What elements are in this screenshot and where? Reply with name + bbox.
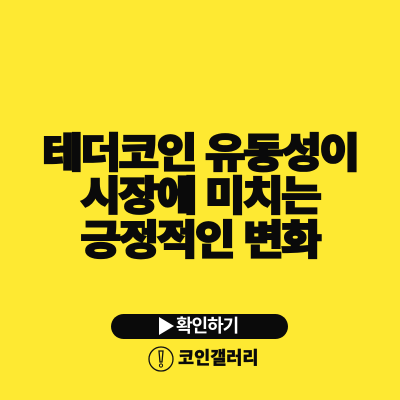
title: 긍정적인 변화 <box>80 218 320 263</box>
title: 시장에 미치는 <box>80 174 320 219</box>
logo text: 코인갤러리 <box>178 348 258 368</box>
icon: exclamation circle <box>148 346 174 372</box>
icon: play triangle <box>159 317 174 335</box>
button: confirm <box>111 314 288 339</box>
logo: coin gallery <box>148 346 258 372</box>
button label: 확인하기 <box>176 316 238 336</box>
title: 테더코인 유동성이 <box>42 131 358 176</box>
title <box>42 131 358 263</box>
